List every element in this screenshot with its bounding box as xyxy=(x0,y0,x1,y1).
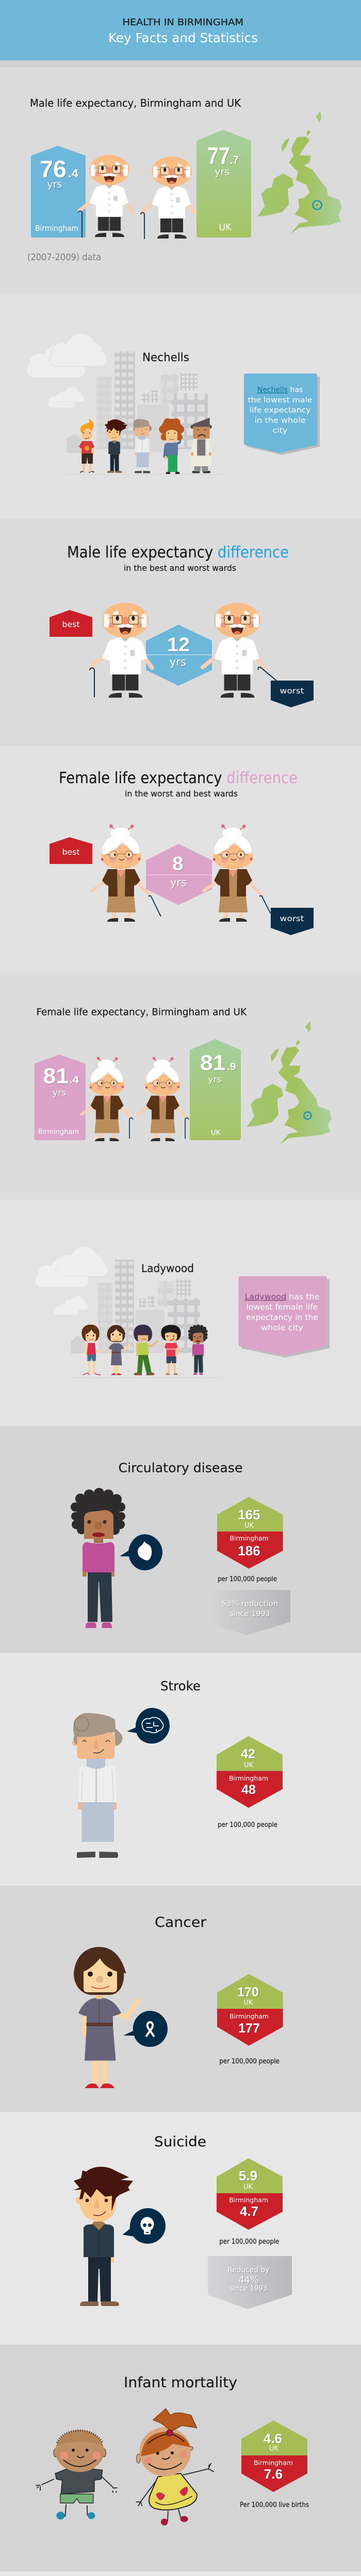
hexagon: UK 165, Birmingham 186 xyxy=(217,1497,283,1569)
heading: Male life expectancy difference xyxy=(67,544,289,562)
hexagon: UK 5.9, Birmingham 4.7 xyxy=(217,2158,283,2230)
heading: Nechells: Nechells xyxy=(142,351,189,364)
figure: woman in green trousers xyxy=(134,1325,157,1375)
figure: woman with curly red hair xyxy=(159,418,184,474)
bar: Birmingham 81.4 years: .4 xyxy=(69,1075,79,1086)
icon: speech bubble with heart xyxy=(120,1534,162,1570)
hexagon: UK 165, Birmingham 186: 186 xyxy=(238,1543,260,1558)
ribbon: 53% reduction since 1993: 53% reduction xyxy=(221,1600,278,1608)
panel: childhood obesity xyxy=(0,2571,361,2576)
heading: Health in Birmingham: HEALTH IN BIRMINGHAM xyxy=(123,17,243,28)
label: worst: worst xyxy=(280,914,304,923)
figure: old woman, worst ward xyxy=(204,824,270,922)
hexagon: UK 170, Birmingham 177: UK xyxy=(243,1999,253,2007)
figure: old man, worst ward xyxy=(203,603,276,698)
subheading: in the worst and best wards xyxy=(125,789,238,799)
panel: male life expectancy difference xyxy=(0,519,361,746)
hexagon: UK 42, Birmingham 48: 48 xyxy=(241,1783,256,1797)
ribbon: reduced by 44% since 1993: since 1993 xyxy=(230,2284,267,2293)
callout: Nechells lowest male life expectancy: the lowest male xyxy=(248,396,313,404)
bar: UK 81.9 years: .9 xyxy=(227,1061,236,1073)
hexagon: UK 165, Birmingham 186: Birmingham xyxy=(230,1535,268,1542)
bar: UK 77.7 years: 77 xyxy=(207,142,230,169)
hexagon: UK 4.6, Birmingham 7.6 xyxy=(241,2420,307,2492)
hexagon: UK 42, Birmingham 48: UK xyxy=(244,1761,253,1769)
bar: UK 81.9 years xyxy=(190,1039,241,1140)
label: best xyxy=(50,837,92,864)
heading: Ladywood: Ladywood xyxy=(141,1262,194,1275)
figure: older person in white xyxy=(133,419,152,473)
heading: Female life expectancy difference xyxy=(59,769,298,787)
figure: woman in grey dress xyxy=(74,1947,138,2088)
hexagon: UK 4.6, Birmingham 7.6: Birmingham xyxy=(254,2460,293,2467)
callout: Nechells lowest male life expectancy: life expectancy xyxy=(250,406,310,414)
note: per 100,000 people: per 100,000 people xyxy=(218,1821,277,1829)
callout: Ladywood lowest female life expectancy: whole city xyxy=(261,1323,303,1332)
ribbon: 53% reduction since 1993 xyxy=(206,1590,290,1635)
bar: Birmingham 76.4 years: yrs xyxy=(47,179,62,190)
figure: old man with cane, left xyxy=(78,155,133,238)
hexagon: 8 years difference xyxy=(146,844,212,905)
bar: Birmingham 76.4 years xyxy=(31,146,86,238)
figure: woman in grey dress xyxy=(107,1325,130,1375)
bar: UK 77.7 years xyxy=(196,130,251,238)
clouds xyxy=(36,1246,108,1314)
icon: speech bubble with ribbon xyxy=(123,2011,168,2047)
callout: Nechells lowest male life expectancy: Nechells has xyxy=(257,386,303,394)
figure: old man, best ward xyxy=(90,603,152,698)
bar: UK 77.7 years: yrs xyxy=(215,166,229,178)
figure: man in lab coat xyxy=(190,418,212,473)
bar: UK 77.7 years: .7 xyxy=(230,154,239,166)
callout: Ladywood lowest female life expectancy: expectancy in the xyxy=(246,1313,318,1322)
figure: older person xyxy=(72,1713,123,1858)
panel: stroke xyxy=(0,1653,361,1886)
bar: Birmingham 76.4 years: 76 xyxy=(40,156,67,182)
bar: Birmingham 76.4 years: .4 xyxy=(68,167,79,180)
hexagon: UK 42, Birmingham 48: 42 xyxy=(241,1747,255,1761)
note: per 100,000 live births: Per 100,000 live births xyxy=(240,2501,309,2509)
panel: suicide xyxy=(0,2112,361,2345)
map: UK with Birmingham marker xyxy=(257,111,342,234)
heading: Circulatory disease xyxy=(119,1460,242,1476)
panel: Nechells xyxy=(0,294,361,519)
heading: Infant mortality xyxy=(124,2374,237,2391)
label: worst xyxy=(271,681,314,707)
subheading: in the best and worst wards xyxy=(124,563,236,573)
heading: Male life expectancy, Birmingham and UK xyxy=(30,97,241,109)
hexagon: 12 years difference xyxy=(146,624,212,686)
figures: five Ladywood residents xyxy=(81,1325,208,1375)
figure: girl with black hair xyxy=(161,1325,181,1375)
label: best: best xyxy=(62,620,80,629)
callout: Ladywood lowest female life expectancy: lowest female life xyxy=(247,1302,318,1312)
bar: Birmingham 81.4 years: Birmingham xyxy=(38,1128,79,1136)
heading: Key Facts and Statistics: Key Facts and Statistics xyxy=(108,30,258,45)
figure: old woman with cane, left xyxy=(81,1057,133,1141)
panel: header xyxy=(0,0,361,60)
callout: Ladywood lowest female life expectancy xyxy=(238,1276,330,1358)
figures: five Nechells residents xyxy=(79,418,212,474)
hexagon: UK 170, Birmingham 177: 170 xyxy=(237,1985,259,1999)
panel: female life expectancy Birmingham and UK xyxy=(0,973,361,1199)
figure: young man xyxy=(74,2167,133,2306)
bar: Birmingham 81.4 years xyxy=(34,1055,86,1140)
callout: Nechells lowest male life expectancy xyxy=(244,374,320,455)
hexagon: UK 42, Birmingham 48 xyxy=(217,1736,283,1808)
note: per 100,000 people: per 100,000 people xyxy=(219,2238,279,2246)
heading: Female life expectancy, Birmingham and UK xyxy=(36,1007,247,1018)
bar: UK 77.7 years: UK xyxy=(219,222,232,233)
hexagon: UK 170, Birmingham 177: 177 xyxy=(238,2021,260,2036)
heading: Suicide xyxy=(154,2134,206,2150)
hexagon: UK 4.6, Birmingham 7.6: 4.6 xyxy=(264,2431,282,2446)
panel: male life expectancy Birmingham and UK xyxy=(0,60,361,294)
figure: old woman with cane, right xyxy=(137,1057,189,1141)
map: UK with Birmingham marker xyxy=(247,1022,332,1144)
callout: Nechells lowest male life expectancy: in the whole xyxy=(255,416,305,425)
city buildings xyxy=(71,1260,200,1353)
hexagon: UK 170, Birmingham 177: Birmingham xyxy=(229,2013,269,2020)
hexagon: UK 5.9, Birmingham 4.7: UK xyxy=(243,2183,253,2191)
bar: Birmingham 81.4 years: 81 xyxy=(43,1063,69,1088)
hexagon: UK 42, Birmingham 48: Birmingham xyxy=(229,1775,268,1782)
bar: UK 81.9 years: UK xyxy=(211,1129,220,1137)
hexagon: UK 4.6, Birmingham 7.6: UK xyxy=(269,2445,278,2453)
bar: Birmingham 81.4 years: yrs xyxy=(53,1088,66,1098)
city buildings xyxy=(67,351,208,453)
figure: woman with afro xyxy=(188,1325,208,1375)
hexagon: 8 years difference: yrs xyxy=(170,876,187,889)
panel: female life expectancy difference xyxy=(0,746,361,973)
bar: UK 81.9 years: yrs xyxy=(208,1075,222,1085)
figures: two children xyxy=(36,2409,214,2526)
figure: old man with cane, right xyxy=(141,157,195,239)
note: per 100,000 people: per 100,000 people xyxy=(218,1575,277,1583)
hexagon: UK 5.9, Birmingham 4.7: 5.9 xyxy=(239,2168,257,2183)
ribbon: reduced by 44% since 1993: 44% xyxy=(238,2275,259,2286)
panel: Ladywood xyxy=(0,1199,361,1426)
hexagon: UK 5.9, Birmingham 4.7: 4.7 xyxy=(240,2204,258,2219)
figure: boy xyxy=(36,2430,118,2519)
figure: woman in red top xyxy=(81,1325,103,1375)
label: worst: worst xyxy=(280,686,304,696)
callout: Nechells lowest male life expectancy: city xyxy=(272,427,288,435)
hexagon: UK 5.9, Birmingham 4.7: Birmingham xyxy=(229,2197,268,2204)
callout: Ladywood lowest female life expectancy: Ladywood has the xyxy=(244,1292,320,1301)
bar: Birmingham 76.4 years: Birmingham xyxy=(35,224,78,233)
figure: old woman, best ward xyxy=(92,824,161,922)
label: worst xyxy=(271,908,314,935)
panel: infant mortality xyxy=(0,2345,361,2571)
hexagon: 12 years difference: 12 xyxy=(167,634,190,656)
icon: speech bubble with skull xyxy=(123,2208,166,2244)
hexagon: 8 years difference: 8 xyxy=(172,853,184,875)
label: best: best xyxy=(62,848,80,857)
clouds xyxy=(27,333,107,408)
ribbon: reduced by 44% since 1993 xyxy=(208,2256,292,2309)
panel: cancer xyxy=(0,1886,361,2112)
panel: circulatory disease xyxy=(0,1426,361,1653)
heading: Cancer xyxy=(155,1914,207,1930)
hexagon: 12 years difference: yrs xyxy=(170,656,186,668)
note: per 100,000 people: per 100,000 people xyxy=(219,2058,280,2065)
hexagon: UK 4.6, Birmingham 7.6: 7.6 xyxy=(264,2466,283,2482)
hexagon: UK 165, Birmingham 186: 165 xyxy=(238,1507,260,1522)
figure: teenager with dark hair xyxy=(105,419,127,473)
figure: girl xyxy=(136,2409,214,2526)
hexagon: UK 170, Birmingham 177 xyxy=(217,1974,283,2046)
figure: woman with afro xyxy=(71,1488,125,1628)
figure: boy xyxy=(79,419,94,472)
source note: (2007-2009) data xyxy=(27,252,101,263)
ribbon: reduced by 44% since 1993: Reduced by xyxy=(228,2266,269,2275)
ribbon: 53% reduction since 1993: since 1993 xyxy=(229,1610,270,1618)
hexagon: UK 165, Birmingham 186: UK xyxy=(244,1522,254,1530)
icon: speech bubble with brain xyxy=(127,1708,170,1743)
bar: UK 81.9 years: 81 xyxy=(200,1050,226,1075)
heading: Stroke xyxy=(160,1679,201,1693)
label: best xyxy=(50,610,92,637)
